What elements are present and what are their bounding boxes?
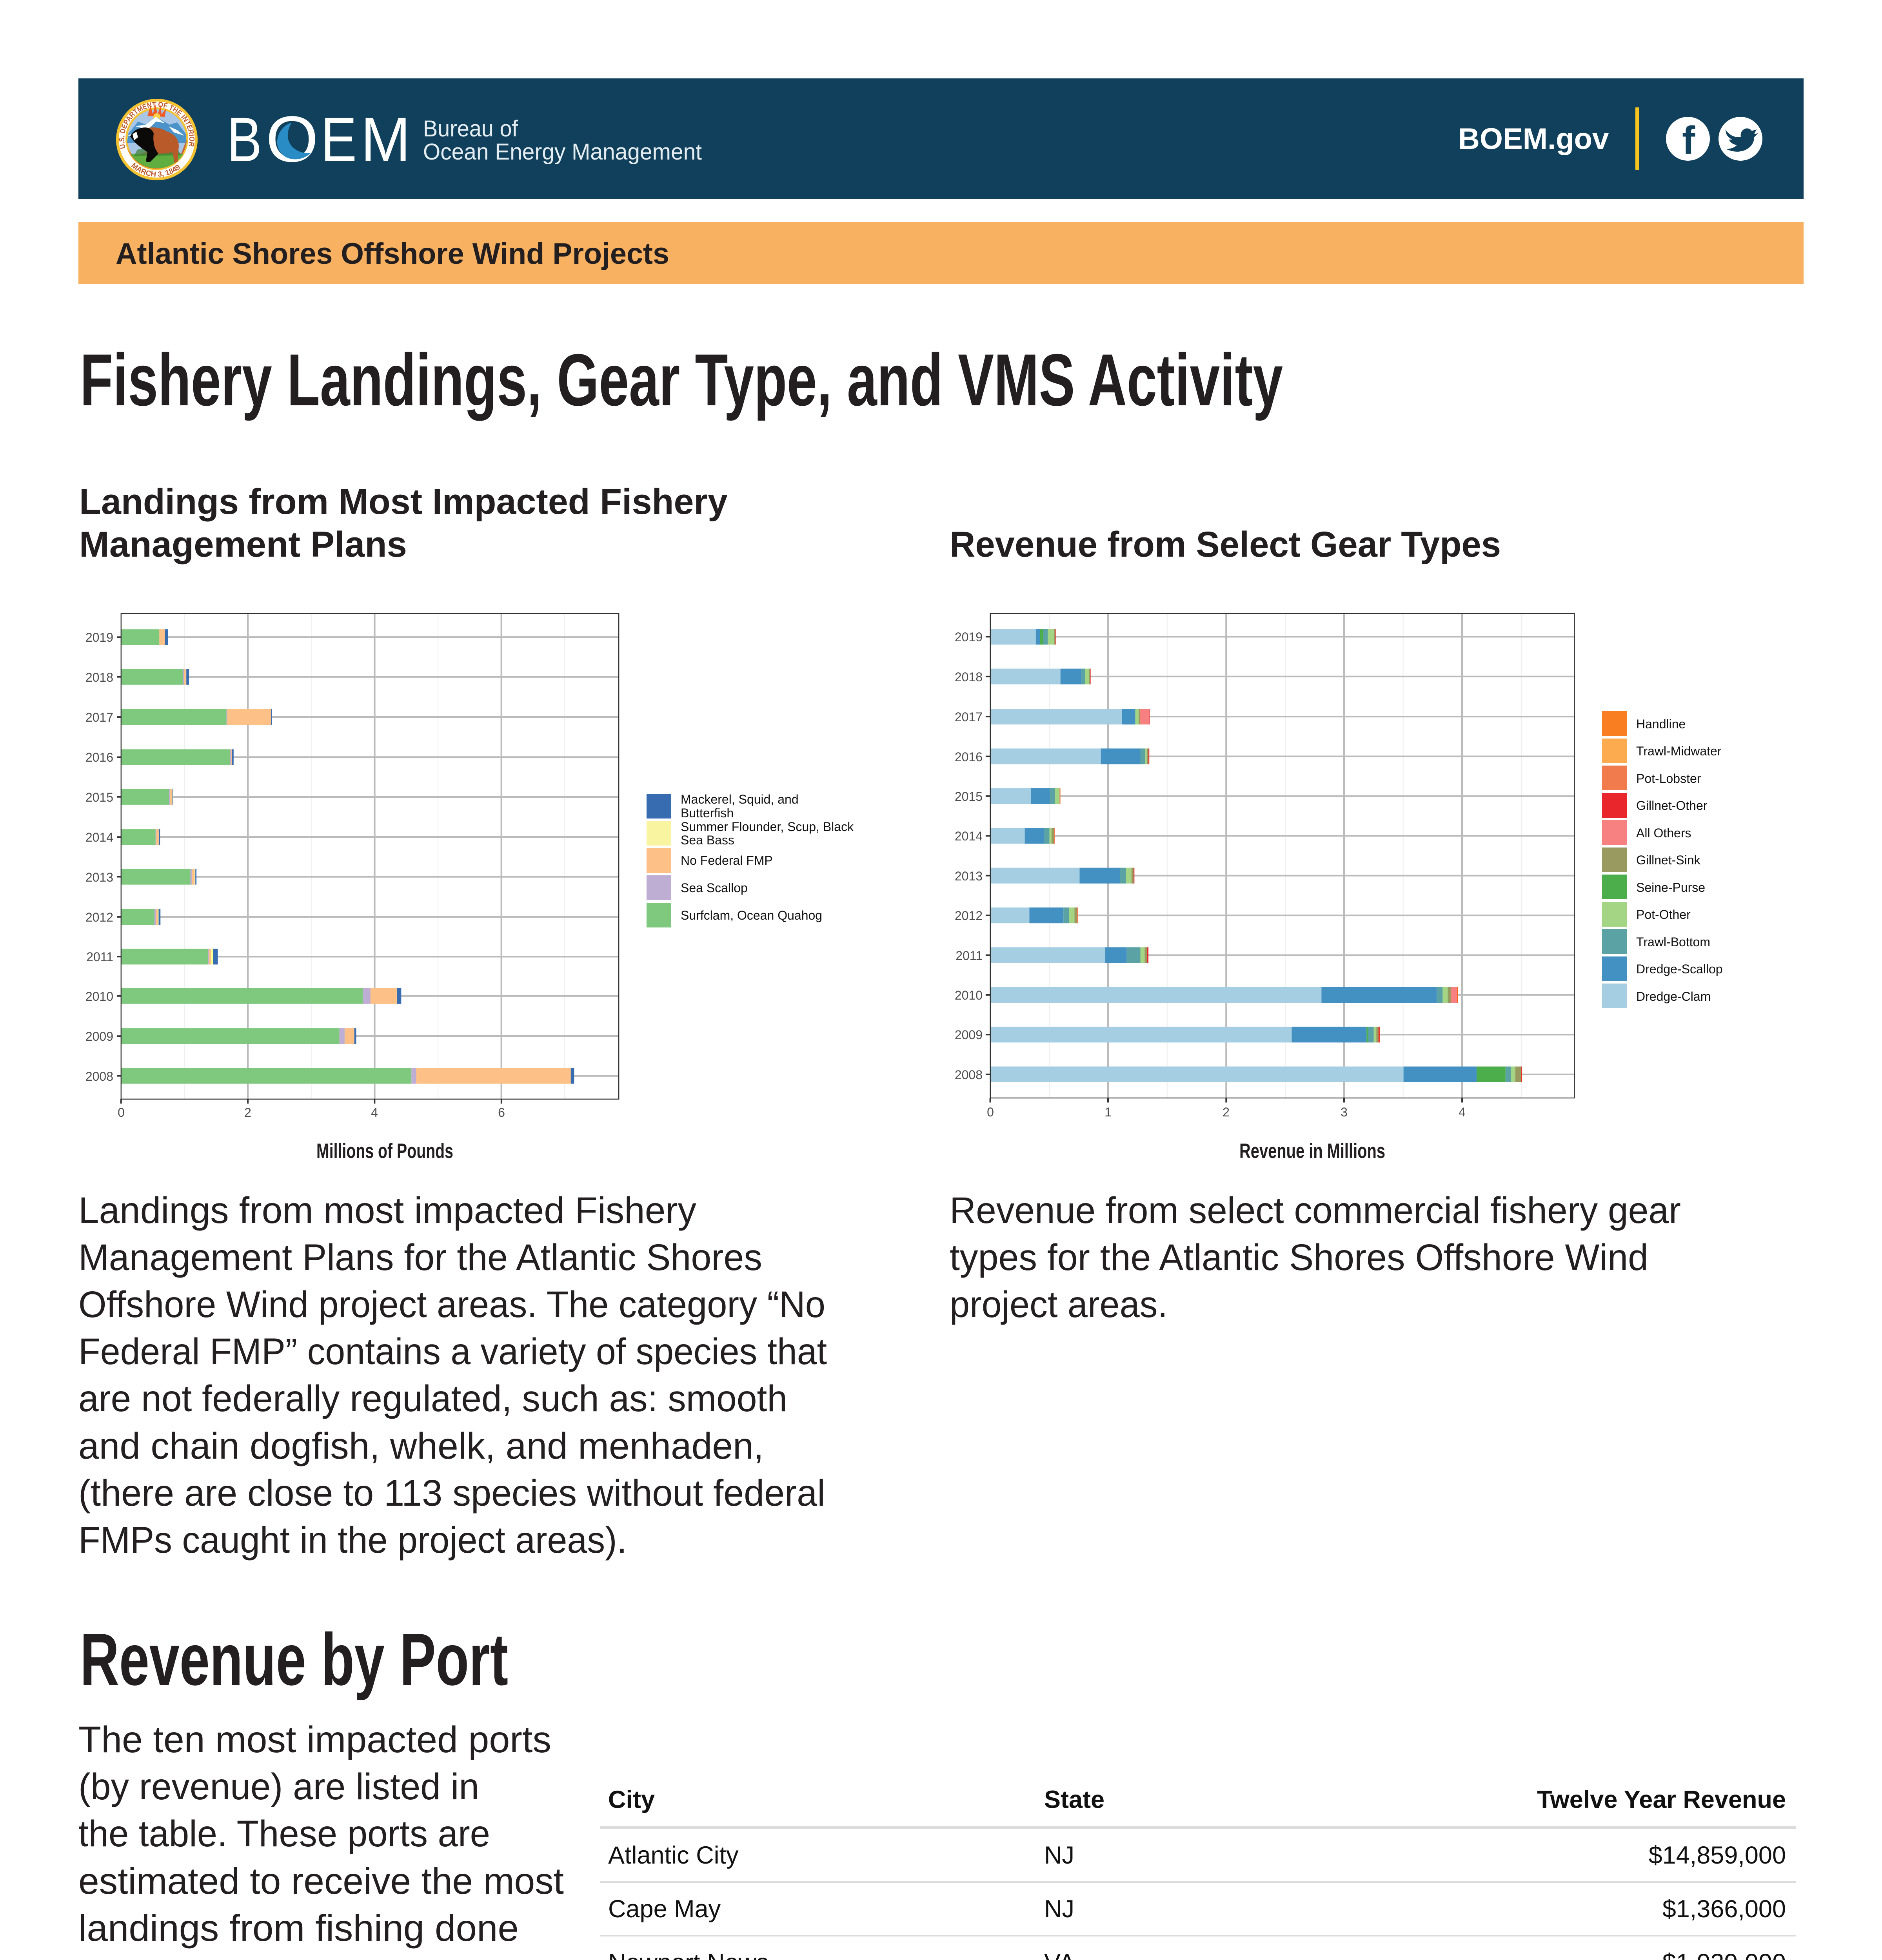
y axis labels: 2017	[85, 710, 113, 724]
bar: 2016	[121, 749, 234, 765]
y axis labels: 2009	[955, 1028, 983, 1042]
header banner	[78, 78, 1804, 199]
project banner: Atlantic Shores Offshore Wind Projects	[116, 237, 669, 270]
icon: Department of the Interior seal	[116, 99, 198, 180]
y axis labels: 2009	[85, 1029, 113, 1044]
bar: 2013	[121, 869, 196, 885]
bar: 2018	[990, 669, 1091, 684]
x axis labels: 2	[1223, 1105, 1230, 1119]
bar: 2013	[990, 868, 1134, 884]
logo: BOEM wordmark	[227, 103, 411, 176]
table header	[600, 1786, 1796, 1829]
legend: Sea Scallop	[681, 881, 748, 895]
table: revenue by port	[600, 1786, 1796, 1960]
y axis labels: 2008	[955, 1068, 983, 1082]
row: Atlantic City: NJ	[1044, 1842, 1074, 1869]
y axis labels: 2016	[955, 750, 983, 764]
heading: landings: Management Plans	[79, 524, 407, 564]
x axis labels: 1	[1104, 1105, 1112, 1119]
y axis labels: 2014	[85, 830, 113, 844]
x axis labels	[118, 1105, 505, 1120]
legend: All Others	[1636, 826, 1691, 840]
logo: BOEM wordmark: E	[321, 104, 357, 174]
y axis labels: 2012	[85, 910, 113, 924]
x axis labels: 3	[1341, 1105, 1348, 1119]
legend: Seine-Purse	[1636, 880, 1705, 895]
x axis labels: 0	[987, 1105, 994, 1119]
row: Cape May: NJ	[1044, 1895, 1074, 1923]
x axis title: Revenue in Millions	[1239, 1140, 1385, 1163]
row: Atlantic City: $14,859,000	[1649, 1842, 1786, 1869]
legend: Dredge-Clam	[1636, 989, 1711, 1004]
y axis labels: 2019	[955, 630, 983, 644]
agency name: Bureau of	[423, 116, 518, 142]
legend: Gillnet-Sink	[1636, 853, 1701, 867]
row: Atlantic City	[600, 1842, 1796, 1883]
text block: landings description: and chain dogfish, whelk, and menhaden,	[78, 1425, 764, 1467]
icon: facebook: f	[1682, 118, 1695, 162]
x axis labels: 4	[371, 1105, 378, 1120]
logo: BOEM wordmark: B	[227, 104, 262, 174]
text block: port description: the table. These ports are	[78, 1813, 490, 1855]
logo: BOEM wordmark: M	[361, 104, 411, 174]
y axis labels: 2017	[955, 710, 983, 724]
y axis labels: 2011	[956, 949, 983, 963]
y axis labels: 2016	[85, 750, 113, 764]
bar: 2009	[990, 1027, 1380, 1042]
bar: 2018	[121, 669, 189, 685]
bar: 2008	[121, 1068, 574, 1084]
title: Fishery Landings, Gear Type, and VMS Activity	[80, 339, 1283, 421]
bar: 2012	[990, 907, 1078, 923]
text block: landings description: Management Plans for the Atlantic Shores	[78, 1237, 762, 1278]
y axis labels: 2013	[955, 869, 983, 883]
bar: 2014	[121, 829, 160, 845]
legend: Pot-Lobster	[1636, 771, 1701, 786]
bar: 2008	[990, 1067, 1522, 1082]
legend: Dredge-Scallop	[1636, 962, 1723, 976]
legend: Trawl-Midwater	[1636, 744, 1722, 758]
row: Cape May: $1,366,000	[1662, 1895, 1786, 1923]
bar: 2019	[121, 629, 168, 645]
y axis labels: 2008	[85, 1069, 113, 1083]
bar: 2011	[990, 947, 1148, 963]
x axis title: Millions of Pounds	[316, 1140, 453, 1163]
legend: Pot-Other	[1636, 907, 1691, 922]
legend: Trawl-Bottom	[1636, 935, 1710, 949]
row: Atlantic City: Atlantic City	[608, 1842, 739, 1869]
project banner	[78, 222, 1804, 284]
seal lettering: MARCH 3, 1849	[129, 162, 182, 179]
text block: port description: estimated to receive the most	[78, 1860, 564, 1902]
bar chart: revenue by gear type	[955, 613, 1723, 1163]
text block: landings description: Offshore Wind project areas. The category “No	[78, 1284, 825, 1325]
text block: port description: landings from fishing done	[78, 1907, 519, 1949]
y axis labels: 2015	[955, 789, 983, 804]
y axis labels	[85, 630, 113, 1083]
website label: BOEM.gov	[1458, 122, 1609, 156]
text block: landings description	[78, 1190, 827, 1561]
agency name	[423, 116, 702, 165]
text block: landings description: FMPs caught in the project areas).	[78, 1519, 627, 1561]
y axis labels: 2010	[85, 989, 113, 1004]
bar: 2017	[121, 709, 272, 725]
agency name: Ocean Energy Management	[423, 139, 702, 165]
y axis labels: 2012	[955, 909, 983, 923]
legend: Gillnet-Other	[1636, 799, 1708, 813]
text block: landings description: Landings from most impacted Fishery	[78, 1190, 696, 1231]
legend: Mackerel, Squid, and	[681, 792, 799, 806]
x axis labels: 4	[1459, 1105, 1466, 1119]
bar: 2010	[990, 987, 1458, 1003]
y axis labels	[955, 630, 983, 1082]
y axis labels: 2010	[955, 988, 983, 1002]
y axis labels: 2018	[85, 670, 113, 684]
text block: port description: (by revenue) are listed in	[78, 1766, 479, 1808]
x axis labels: 6	[498, 1105, 505, 1120]
table header: City	[608, 1786, 655, 1813]
y axis labels: 2011	[86, 950, 113, 964]
text block: port description	[78, 1719, 564, 1960]
table header: Twelve Year Revenue	[1537, 1786, 1786, 1813]
text block: landings description: are not federally regulated, such as: smooth	[78, 1378, 787, 1419]
bar: 2009	[121, 1028, 356, 1044]
seal lettering	[118, 101, 196, 179]
seal lettering: U.S. DEPARTMENT OF THE INTERIOR	[118, 101, 196, 149]
heading: landings: Landings from Most Impacted Fishery	[79, 482, 728, 522]
logo: BOEM wordmark: O	[266, 103, 318, 176]
legend: Summer Flounder, Scup, Black	[681, 820, 854, 834]
x axis labels: 0	[118, 1105, 125, 1120]
bar: 2019	[990, 629, 1056, 644]
y axis labels: 2015	[85, 790, 113, 804]
text block: landings description: Federal FMP” contains a variety of species that	[78, 1331, 827, 1372]
plot area with grid and bars	[986, 613, 1574, 1102]
text block: revenue description: project areas.	[950, 1284, 1168, 1325]
bar: 2010	[121, 988, 401, 1004]
text block: port description: The ten most impacted ports	[78, 1719, 551, 1760]
y axis labels: 2018	[955, 670, 983, 684]
row: Newport News	[600, 1949, 1796, 1960]
y axis labels: 2014	[955, 829, 983, 843]
text block: revenue description: types for the Atlantic Shores Offshore Wind	[950, 1237, 1648, 1278]
text block: revenue description	[950, 1190, 1681, 1325]
bar: 2011	[121, 949, 218, 964]
bar chart: landings by FMP	[85, 613, 854, 1163]
y axis labels: 2013	[85, 870, 113, 884]
legend: Surfclam, Ocean Quahog	[681, 908, 822, 922]
legend: No Federal FMP	[681, 853, 773, 867]
legend: Butterfish	[681, 806, 734, 820]
table header: State	[1044, 1786, 1104, 1813]
legend	[1602, 711, 1723, 1008]
section heading: revenue by port: Revenue by Port	[80, 1618, 508, 1700]
bar: 2015	[121, 789, 173, 805]
x axis labels	[987, 1105, 1466, 1119]
yellow divider	[1635, 107, 1639, 170]
bar: 2015	[990, 788, 1061, 804]
plot area with grid and bars	[117, 613, 619, 1103]
row: Cape May	[600, 1895, 1796, 1936]
legend	[647, 792, 854, 927]
bar: 2016	[990, 748, 1149, 764]
y axis labels: 2019	[85, 630, 113, 644]
row: Cape May: Cape May	[608, 1895, 721, 1923]
heading: landings	[79, 482, 728, 564]
bar: 2014	[990, 828, 1055, 844]
legend: Handline	[1636, 717, 1686, 731]
legend: Sea Bass	[681, 833, 734, 847]
icon: twitter	[1719, 117, 1762, 161]
bar: 2012	[121, 909, 160, 925]
x axis labels: 2	[244, 1105, 251, 1120]
icon: facebook	[1666, 117, 1710, 162]
text block: revenue description: Revenue from select commercial fishery gear	[950, 1190, 1681, 1231]
text block: landings description: (there are close to 113 species without federal	[78, 1472, 825, 1514]
bar: 2017	[990, 709, 1150, 724]
heading: revenue: Revenue from Select Gear Types	[950, 524, 1501, 564]
